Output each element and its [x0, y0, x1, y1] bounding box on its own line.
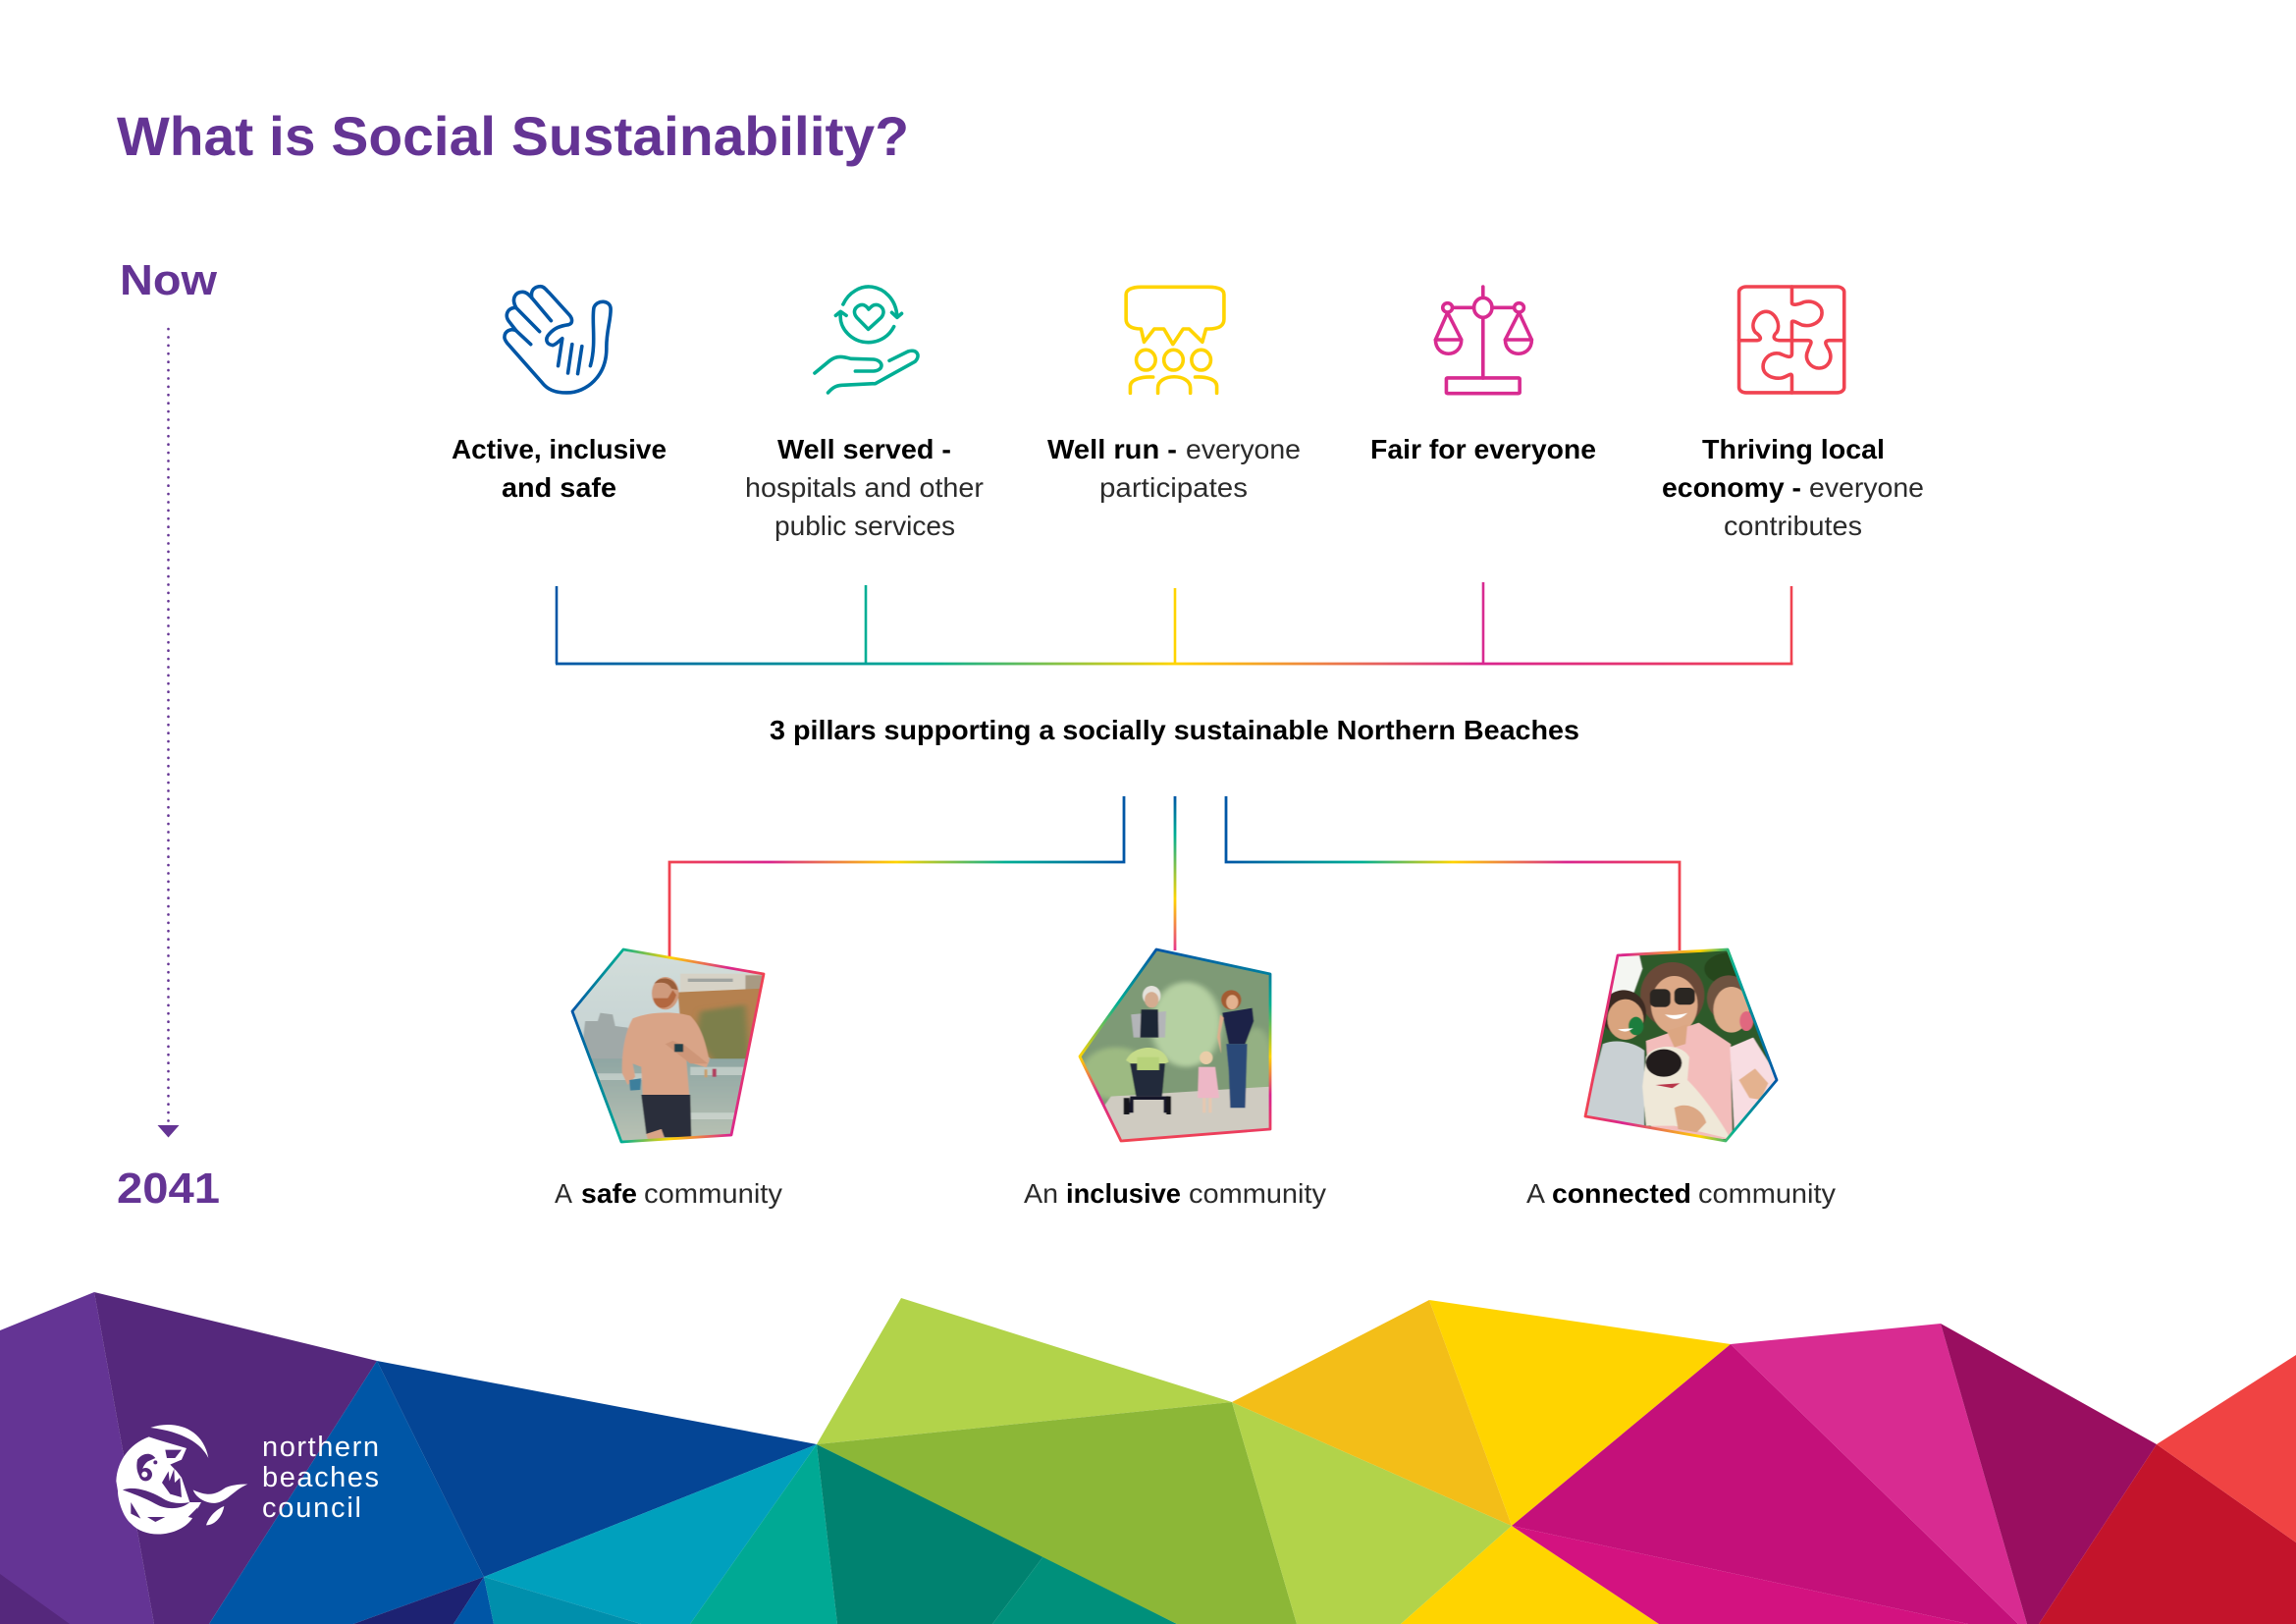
icon: scales — [1435, 287, 1531, 394]
dotted timeline line — [167, 329, 170, 1121]
text: well run: everyone — [1186, 434, 1301, 464]
text: active, inclusive and safe: Active, inclusive — [452, 434, 667, 464]
caption: a connected community: community — [1698, 1178, 1836, 1209]
connector: centre branch — [1174, 796, 1176, 950]
icon: caring hand with heart — [815, 287, 918, 393]
timeline: now to 2041 — [117, 256, 220, 1213]
label: 2041: 2041 — [117, 1164, 220, 1213]
text: fair for everyone: Fair for everyone — [1370, 434, 1596, 464]
text: well served: public services — [774, 511, 955, 541]
photo: runner on beach — [571, 948, 766, 1143]
caption: a connected community: A — [1526, 1178, 1545, 1209]
text: thriving local economy: Thriving local — [1702, 434, 1885, 464]
caption: a connected community: connected — [1552, 1178, 1691, 1209]
caption: an inclusive community — [1024, 1178, 1326, 1209]
label: now: Now — [120, 256, 218, 304]
text: thriving local economy: economy - — [1662, 472, 1801, 503]
logo: northern beaches council: council — [262, 1492, 361, 1524]
connector: five themes to pillars — [556, 582, 1792, 665]
text: thriving local economy — [1662, 434, 1924, 541]
icon: speech bubble and people — [1126, 287, 1224, 393]
text: well served — [745, 434, 984, 541]
text: well run: Well run - — [1047, 434, 1177, 464]
text: thriving local economy: contributes — [1724, 511, 1862, 541]
photo: family on path — [1076, 947, 1276, 1146]
caption: an inclusive community: An — [1024, 1178, 1058, 1209]
icon: hands — [505, 287, 611, 393]
caption: a connected community — [1526, 1178, 1836, 1209]
caption: a safe community: community — [644, 1178, 782, 1209]
logo: northern beaches council: beaches — [262, 1462, 379, 1493]
caption: a safe community — [555, 1178, 782, 1209]
caption: a safe community: A — [555, 1178, 572, 1209]
caption: an inclusive community: inclusive — [1066, 1178, 1181, 1209]
text: well served: hospitals and other — [745, 472, 984, 503]
text: well run — [1047, 434, 1301, 503]
connector: left branch — [669, 796, 1124, 957]
footer: geometric colour band — [0, 1292, 2296, 1624]
text: active, inclusive and safe — [452, 434, 667, 503]
arrowhead — [157, 1125, 179, 1137]
logo: northern beaches council — [116, 1425, 379, 1535]
icon: puzzle — [1739, 287, 1844, 393]
logo: northern beaches council: northern — [262, 1432, 379, 1463]
text: well served: Well served - — [777, 434, 951, 464]
caption: a safe community: safe — [581, 1178, 637, 1209]
heading: 3 pillars: 3 pillars supporting a socially sustainable Northern Beaches — [770, 715, 1579, 745]
text: thriving local economy: everyone — [1809, 472, 1924, 503]
photo: family with pug — [1580, 947, 1784, 1144]
text: well run: participates — [1099, 472, 1248, 503]
connector: right branch — [1226, 796, 1680, 950]
title: What is Social Sustainability? — [117, 105, 909, 167]
caption: an inclusive community: community — [1189, 1178, 1326, 1209]
logo mark — [116, 1425, 247, 1535]
text: active, inclusive and safe: and safe — [502, 472, 616, 503]
